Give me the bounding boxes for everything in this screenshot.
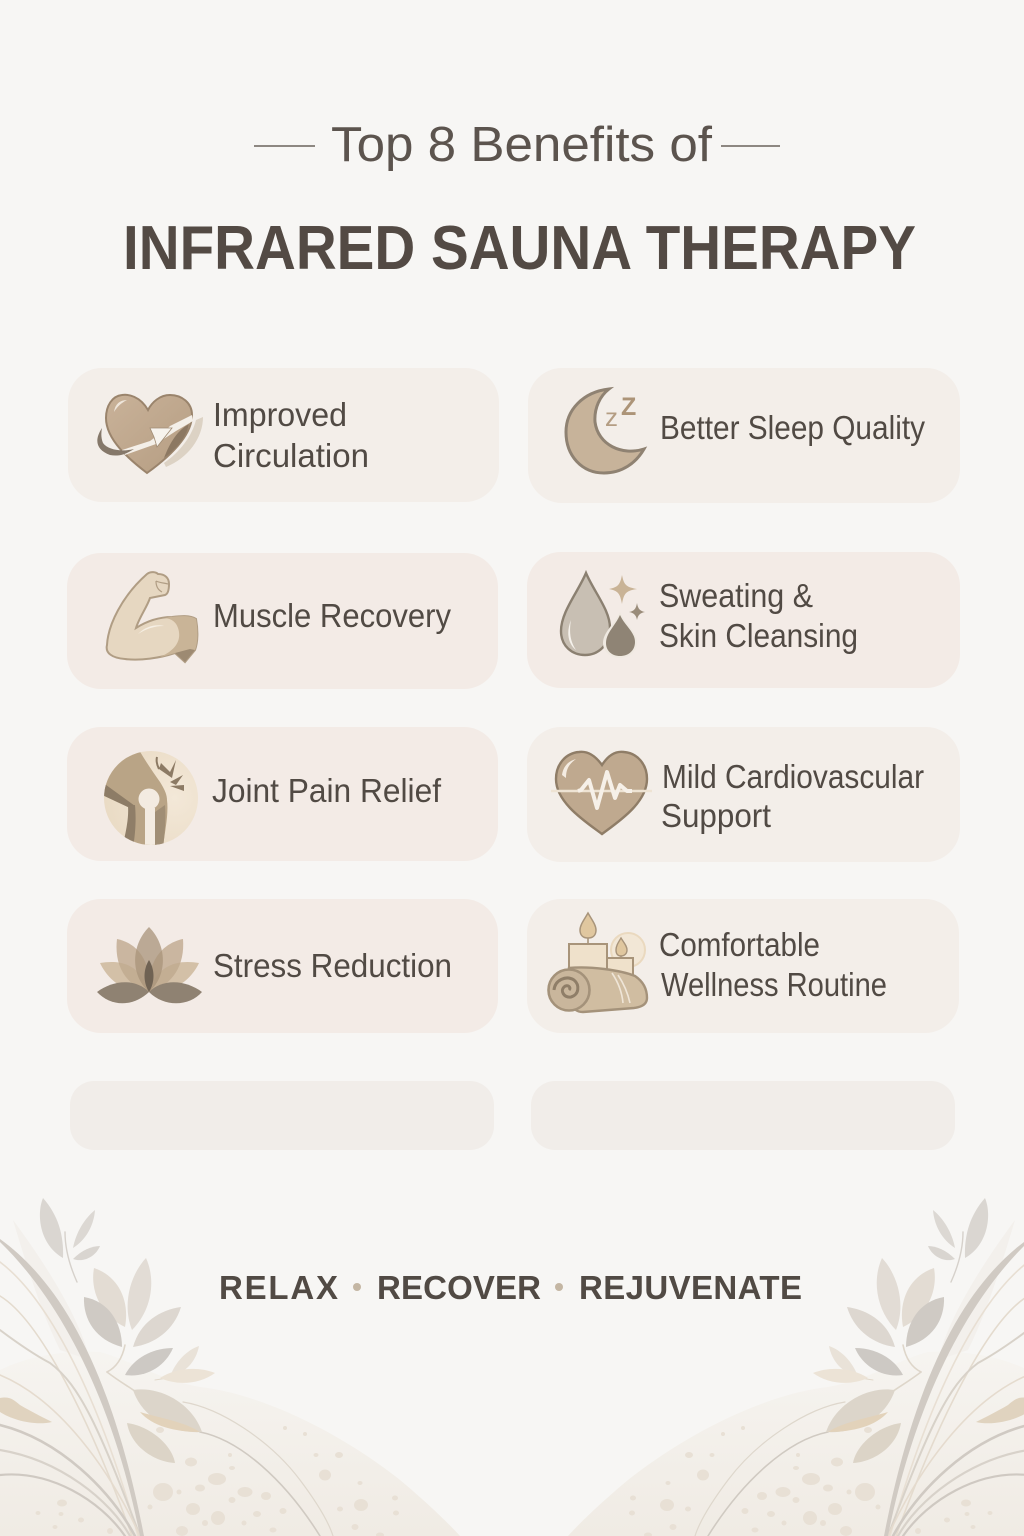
panel: stress reduction [67,899,498,1033]
icon: lotus [97,927,202,1003]
panel: empty bar left [70,1081,494,1150]
label: Joint Pain Relief [212,772,442,809]
label [659,577,858,654]
footer tagline: RECOVER [377,1269,541,1306]
panel: comfortable wellness routine [527,899,959,1033]
foliage: bottom right botanical decoration [568,1198,1024,1536]
icon: heart with pulse line [551,752,652,834]
label [213,396,369,474]
label: Support [661,797,771,834]
label [659,926,887,1003]
panel: empty bar right [531,1081,955,1150]
title: main heading: INFRARED SAUNA THERAPY [123,214,916,283]
label: Mild Cardiovascular [662,758,924,795]
icon: candles and rolled towel [548,913,647,1012]
label: Skin Cleansing [659,617,858,654]
label: Circulation [213,437,369,474]
footer tagline: REJUVENATE [579,1269,802,1306]
panel: sweating and skin cleansing [527,552,960,688]
label: Sweating & [659,577,813,614]
label: Comfortable [659,926,820,963]
label: Better Sleep Quality [660,409,925,446]
panel: joint pain relief [67,727,498,861]
footer tagline: RELAX [219,1269,338,1306]
icon: crescent moon with z letters: z [605,402,618,432]
icon: crescent moon with z letters: Z [621,393,636,421]
panel: mild cardiovascular support [527,727,960,862]
icon: knee joint [100,750,198,848]
label [661,758,924,834]
icon: flexed arm [107,572,197,662]
footer tagline [219,1269,802,1306]
icon: heart with circulation arrow [97,395,203,473]
label: Wellness Routine [661,966,887,1003]
label: Muscle Recovery [213,597,451,634]
panel: better sleep quality [528,368,960,503]
panel: muscle recovery [67,553,498,689]
label: Stress Reduction [213,947,452,984]
label: Improved [213,396,347,433]
foliage: bottom left botanical decoration [0,1198,460,1536]
panel: improved circulation [68,368,499,502]
icon: water drops and sparkles [561,573,645,658]
icon: crescent moon with z letters [566,389,644,473]
title: top line with flanking rules: Top 8 Benefits of [331,118,712,172]
